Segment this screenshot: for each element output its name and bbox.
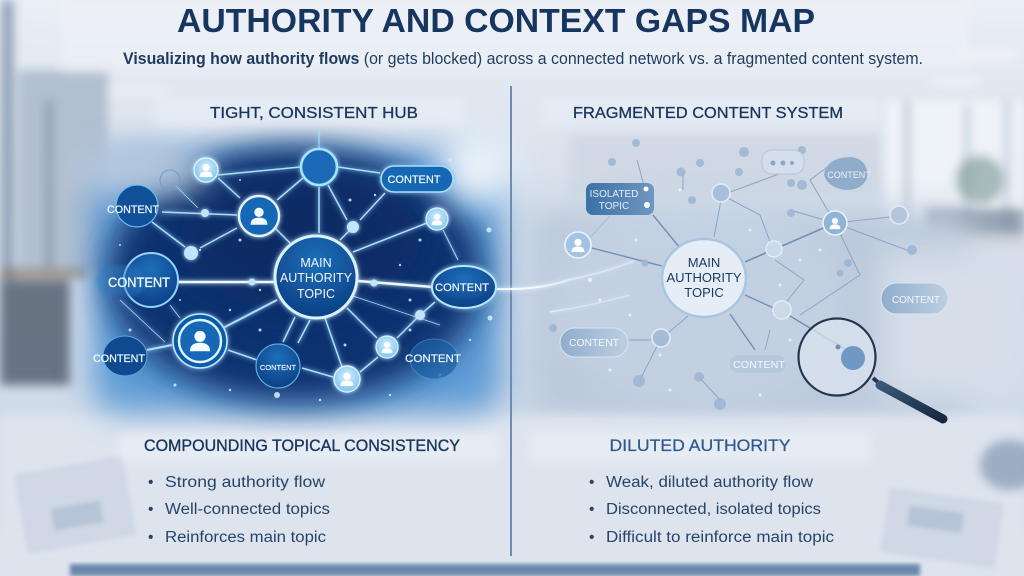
node: person upper: [239, 196, 279, 236]
node: person lower right: [376, 336, 398, 358]
table surface: [0, 415, 1024, 565]
node: content upper left: CONTENT: [107, 204, 159, 216]
satellite nodes: [93, 149, 496, 392]
heading: fragmented content system: [540, 98, 880, 126]
node: content bottom small: [256, 344, 300, 388]
node: content right: [432, 266, 496, 308]
stars: [119, 158, 492, 401]
node: isolated topic: ISOLATED: [590, 189, 638, 200]
node: main authority topic: TOPIC: [297, 287, 335, 301]
bullet list: •: [589, 474, 594, 491]
panel background glow: [70, 125, 520, 412]
node: content right: [881, 283, 948, 314]
node: content top right: CONTENT: [827, 170, 871, 180]
node: content right: CONTENT: [435, 282, 489, 294]
fragmented small nodes: [549, 139, 917, 410]
bullet list: •: [148, 501, 153, 518]
bullet list: •: [148, 474, 153, 491]
icon: magnifying glass: [798, 318, 943, 419]
node: content bottom: CONTENT: [733, 360, 785, 371]
node: content lower left: [560, 328, 628, 357]
node: content bottom small: CONTENT: [260, 363, 297, 372]
bullet list: Well-connected topics: [165, 501, 330, 518]
speckle: [588, 188, 842, 396]
node: content far left: CONTENT: [108, 275, 170, 290]
bullet list: [148, 474, 330, 546]
node: content lower left: CONTENT: [569, 338, 619, 349]
bullet list: Disconnected, isolated topics: [606, 501, 821, 518]
node: person left: [565, 232, 591, 258]
fragmented hollow nodes: [652, 184, 908, 347]
node: content lower right: CONTENT: [405, 353, 461, 365]
bullet list: [589, 474, 834, 546]
node: main authority topic: MAIN: [300, 256, 332, 270]
node: content lower left: [93, 336, 147, 376]
node: main authority topic: MAIN: [688, 255, 720, 270]
heading: tight consistent hub: TIGHT, CONSISTENT HUB: [210, 105, 418, 122]
node: content top right pill: CONTENT: [388, 174, 441, 186]
node: person top left: [194, 158, 218, 182]
authority flow streak: [497, 261, 634, 312]
node: person bottom: [334, 366, 360, 392]
bullet list: •: [589, 529, 594, 546]
fragmented connector lines: [580, 150, 912, 400]
bullet list: •: [589, 501, 594, 518]
node: main authority topic: [662, 239, 746, 317]
node: main authority topic: [275, 236, 357, 318]
heading: DILUTED AUTHORITY: [610, 437, 790, 455]
speech bubble icon: [762, 150, 804, 174]
node: isolated topic: TOPIC: [599, 201, 629, 212]
panel: fragmented network: [540, 98, 948, 419]
node: person right: [426, 208, 448, 230]
bullet list: Reinforces main topic: [165, 529, 326, 546]
right lower haze: [530, 210, 970, 420]
node: person right: [823, 211, 847, 235]
node: content right: CONTENT: [892, 295, 940, 306]
panel: diluted authority text: [589, 437, 834, 546]
node: person lower left large: [173, 314, 227, 368]
bullet list: Weak, diluted authority flow: [606, 474, 814, 491]
title: AUTHORITY AND CONTEXT GAPS MAP: [177, 2, 815, 39]
node: isolated topic: [586, 183, 654, 215]
node: faint outline circle: [160, 170, 180, 190]
subtitle: Visualizing how authority flows (or gets blocked) across a connected network vs. a fragmented content system.: [123, 50, 923, 68]
node: content bottom: [730, 355, 786, 373]
node: content lower right: [405, 339, 461, 379]
node: top hollow circle: [301, 149, 337, 185]
heading: fragmented content system: FRAGMENTED CONTENT SYSTEM: [573, 105, 843, 122]
panel haze: [550, 190, 850, 410]
node: content top right: [824, 157, 871, 190]
hub connector lines: [120, 130, 458, 377]
node: content top right pill: [381, 166, 453, 192]
heading: tight consistent hub: [155, 98, 465, 126]
node: content far left: [96, 253, 178, 307]
bullet list: Difficult to reinforce main topic: [606, 529, 834, 546]
node: content upper left: [107, 185, 159, 227]
lower band: [120, 432, 500, 462]
center divider: [510, 86, 512, 556]
node: main authority topic: TOPIC: [684, 285, 724, 300]
panel: compounding topical consistency text: [144, 437, 460, 546]
title band: [60, 0, 970, 72]
bullet list: Strong authority flow: [165, 474, 326, 491]
small junction nodes: [184, 209, 425, 320]
bullet list: •: [148, 529, 153, 546]
heading: COMPOUNDING TOPICAL CONSISTENCY: [144, 437, 460, 455]
node: main authority topic: AUTHORITY: [666, 270, 742, 285]
node: main authority topic: AUTHORITY: [280, 271, 353, 285]
panel: tight hub network: [70, 98, 520, 412]
node: content lower left: CONTENT: [93, 353, 145, 365]
